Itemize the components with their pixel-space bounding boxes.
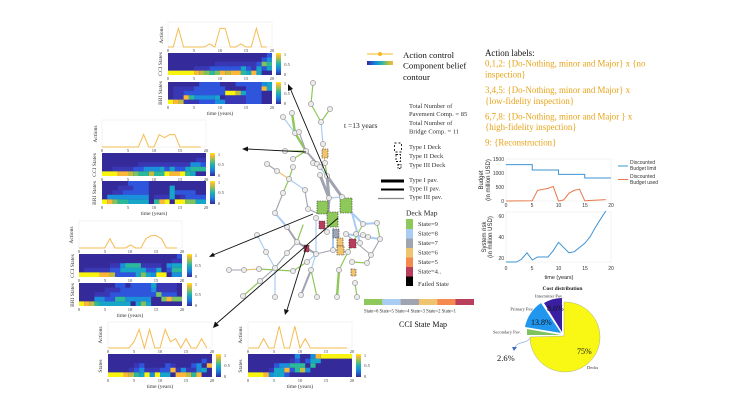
- text: action labels: {high-fidelity inspection}: [485, 122, 577, 132]
- axis labels: BRI States: [92, 181, 98, 205]
- axis labels: 0: [101, 205, 104, 210]
- chart: system risk: 20: [608, 266, 614, 272]
- colorbars: 0.5: [195, 263, 202, 268]
- colorbar: 0.5: [224, 363, 231, 368]
- chart: system risk: 5: [531, 266, 534, 272]
- arrow: to fourth plots: [213, 218, 338, 328]
- colorbars: 1: [284, 52, 286, 57]
- text: action labels: Action labels:: [485, 48, 535, 58]
- chart: system risk: 15: [582, 266, 588, 272]
- chart: actions line: 15: [184, 349, 189, 354]
- axis labels: [238, 359, 355, 390]
- text: component totals: Total Number of: [409, 103, 453, 110]
- axis labels: 15: [154, 307, 159, 312]
- arrow: to third plots: [209, 214, 313, 257]
- legend: deck types: [394, 143, 446, 169]
- axis labels: 10: [152, 205, 157, 210]
- axis labels: time (years): [287, 383, 313, 390]
- text: time stamp: t =13 years: [344, 121, 377, 130]
- axis labels: 20: [350, 378, 355, 383]
- chart: actions line: Actions: [98, 326, 104, 344]
- axis labels: 5: [127, 205, 130, 210]
- chart: actions line: 0: [101, 148, 104, 153]
- axis labels: 15: [324, 378, 329, 383]
- colorbar: 1: [224, 353, 226, 358]
- chart: budget: 10: [556, 203, 561, 209]
- chart: actions line: 20: [270, 48, 275, 53]
- legend: budget lines: Budget used: [630, 180, 658, 186]
- chart: budget: 0: [505, 203, 508, 209]
- axis labels: 5: [193, 76, 196, 81]
- text: action labels: 9: {Reconstruction}: [485, 138, 556, 148]
- axis labels: 0: [78, 278, 81, 283]
- chart: actions line: 20: [210, 349, 215, 354]
- axis labels: 0: [167, 76, 170, 81]
- axis labels: CCI States: [92, 153, 98, 177]
- chart: actions line: Actions: [69, 226, 75, 244]
- chart: actions line: 15: [178, 148, 183, 153]
- heatmap: BRI states: [102, 181, 206, 204]
- chart: budget: [479, 157, 614, 209]
- chart: cost distribution pie: 75%: [577, 347, 592, 356]
- axis labels: 15: [178, 205, 183, 210]
- text: action labels: [485, 48, 646, 148]
- legend: deck types: Type II Deck: [409, 153, 444, 160]
- chart: cost distribution pie: 2.6%: [497, 353, 515, 363]
- axis labels: 10: [158, 378, 163, 383]
- axis labels: BRI States: [158, 81, 164, 105]
- legend: deck types: Type III Deck: [409, 162, 446, 169]
- legend: budget lines: [618, 160, 658, 186]
- axis labels: [92, 153, 209, 217]
- colorbar: 1: [364, 353, 366, 358]
- axis labels: 20: [270, 76, 275, 81]
- legend: deck map: State=5: [418, 259, 438, 266]
- colorbars: 0: [284, 72, 287, 77]
- legend: pavement types: Type III pav.: [409, 194, 443, 201]
- colorbar: 0: [364, 374, 367, 379]
- chart: system risk: (in million USD): [488, 216, 494, 258]
- colorbars: 0: [195, 303, 198, 308]
- axis labels: time (years): [117, 312, 143, 319]
- axis labels: 10: [218, 105, 223, 110]
- axis labels: 10: [128, 278, 133, 283]
- chart: cost distribution pie: [493, 286, 600, 372]
- axis labels: BRI States: [70, 283, 76, 307]
- colorbar: 0: [224, 374, 227, 379]
- axis labels: 5: [104, 307, 107, 312]
- chart: actions line: [159, 22, 275, 53]
- axis labels: time (years): [147, 383, 173, 390]
- panel: top component plots: [158, 22, 291, 117]
- chart: cost distribution pie: 8.6%: [547, 304, 564, 313]
- axis labels: 20: [270, 105, 275, 110]
- chart: actions line: [69, 221, 185, 254]
- legend: budget lines: Discounted: [630, 174, 655, 180]
- legend: budget lines: Discounted: [630, 160, 655, 166]
- legend: pavement types: Type II pav.: [409, 186, 440, 192]
- axis labels: 20: [210, 378, 215, 383]
- colorbars: [210, 152, 225, 206]
- axis labels: 5: [127, 177, 130, 182]
- legend: pavement types: [378, 177, 443, 201]
- chart: system risk: 60: [498, 214, 504, 220]
- chart: system risk: 40: [498, 235, 504, 241]
- axis labels: 10: [298, 378, 303, 383]
- axis labels: 0: [247, 378, 250, 383]
- axis labels: time (years): [207, 110, 233, 117]
- legend: CCI state map: CCI State Map: [399, 320, 447, 329]
- chart: budget: (in million USD): [486, 159, 492, 201]
- colorbars: 0: [195, 274, 198, 279]
- axis labels: 0: [107, 378, 110, 383]
- chart: actions line: [238, 322, 355, 354]
- axis labels: 15: [178, 177, 183, 182]
- chart: budget: 0: [501, 199, 504, 205]
- axis labels: 10: [218, 76, 223, 81]
- axis labels: 5: [104, 278, 107, 283]
- legend: deck map: State=4..: [418, 268, 442, 276]
- chart: actions line: 10: [218, 48, 223, 53]
- colorbars: 0.5: [284, 91, 291, 96]
- heatmap: BRI states: [168, 82, 272, 104]
- chart: actions line: 10: [298, 349, 303, 354]
- chart: budget: Budget: [479, 170, 485, 190]
- chart: actions line: 20: [350, 349, 355, 354]
- chart: budget: 1000: [493, 171, 504, 177]
- chart: actions line: 5: [133, 349, 136, 354]
- colorbars: 1: [195, 282, 197, 287]
- colorbars: 0: [284, 101, 287, 106]
- chart: cost distribution pie: Cost distribution: [543, 286, 582, 292]
- legend: action control and belief contour: contour: [403, 72, 430, 82]
- chart: cost distribution pie: 13.8%: [531, 318, 552, 327]
- deck squares: [304, 149, 356, 276]
- arrow: to second plots: [242, 146, 306, 152]
- axis labels: 15: [244, 76, 249, 81]
- legend: action control and belief contour: [367, 50, 466, 82]
- chart: system risk: [482, 211, 614, 281]
- colorbars: 0.5: [195, 292, 202, 297]
- heatmap: CCI states: [102, 153, 206, 176]
- legend: action control and belief contour: Component belief: [403, 60, 466, 70]
- network edges: [229, 83, 380, 297]
- legend: deck map: State=7: [418, 240, 439, 247]
- colorbars: 1: [284, 81, 286, 86]
- panel: fourth component plots: [98, 322, 231, 390]
- legend: deck map: Failed State: [418, 281, 449, 288]
- chart: system risk: 20: [498, 256, 504, 262]
- text: action labels: {low-fidelity inspection}: [485, 96, 574, 106]
- text: action labels: 6,7,8: {Do-Nothing, minor and Major } x: [485, 112, 633, 122]
- chart: actions line: 15: [324, 349, 329, 354]
- legend: deck map: State=9: [418, 221, 438, 228]
- axis labels: [70, 254, 185, 319]
- axis labels: 0: [101, 177, 104, 182]
- axis labels: 5: [273, 378, 276, 383]
- legend: deck map: State=8: [418, 230, 438, 238]
- network nodes: [226, 80, 383, 300]
- axis labels: 0: [78, 307, 81, 312]
- legend: deck map: [406, 208, 449, 288]
- chart: actions line: 0: [78, 249, 81, 254]
- chart: actions line: 10: [158, 349, 163, 354]
- chart: budget: 500: [496, 185, 504, 191]
- chart: actions line: 0: [247, 349, 250, 354]
- chart: cost distribution pie: Intermitter Pav.: [535, 294, 563, 298]
- axis labels: 20: [180, 278, 185, 283]
- legend: action control and belief contour: Action control: [403, 50, 455, 60]
- heatmap: CCI states: [79, 254, 182, 277]
- axis labels: 20: [204, 177, 209, 182]
- colorbars: 0.5: [218, 190, 225, 195]
- colorbars: [276, 52, 291, 106]
- colorbar: [356, 353, 371, 379]
- chart: actions line: 10: [128, 249, 133, 254]
- colorbar: [216, 353, 231, 379]
- chart: actions line: Actions: [159, 26, 165, 44]
- axis labels: 10: [128, 307, 133, 312]
- chart: actions line: Actions: [93, 125, 99, 143]
- axis labels: [158, 52, 275, 117]
- chart: system risk: time (years): [544, 275, 574, 281]
- chart: actions line: [93, 120, 209, 153]
- colorbars: 0: [218, 173, 221, 178]
- arrows from network to plots: [209, 84, 338, 328]
- axis labels: CCI States: [70, 254, 76, 278]
- chart: budget: 5: [531, 203, 534, 209]
- legend: budget lines: Budget limit: [630, 166, 657, 172]
- colorbars: 0.5: [284, 62, 291, 67]
- axis labels: 20: [180, 307, 185, 312]
- chart: actions line: 15: [244, 48, 249, 53]
- panel: fifth component plots: [238, 322, 371, 390]
- chart: budget: 15: [582, 203, 588, 209]
- chart: cost distribution pie: Primary Pav.: [510, 306, 534, 312]
- legend: pavement types: Type I pav.: [409, 177, 438, 184]
- chart: actions line: Actions: [238, 326, 244, 344]
- chart: actions line: 5: [127, 148, 130, 153]
- chart: system risk: System risk: [482, 221, 488, 253]
- colorbar: 0.5: [364, 363, 371, 368]
- axis labels: 15: [244, 105, 249, 110]
- colorbars: 1: [218, 152, 220, 157]
- heatmap: states: [248, 354, 352, 377]
- text: component totals: Pavement Comp. = 85: [409, 111, 467, 118]
- axis labels: States: [98, 359, 104, 373]
- axis labels: 15: [184, 378, 189, 383]
- legend: CCI state map: [364, 299, 474, 329]
- chart: actions line: [98, 322, 215, 354]
- arrow: to fifth plots: [284, 245, 307, 315]
- chart: system risk: 0: [505, 266, 508, 272]
- axis labels: 0: [167, 105, 170, 110]
- axis labels: [98, 359, 215, 390]
- colorbars: 0: [218, 201, 221, 206]
- heatmap: states: [108, 354, 212, 377]
- axis labels: CCI States: [158, 52, 164, 76]
- chart: actions line: 20: [204, 148, 209, 153]
- axis labels: time (years): [141, 210, 167, 217]
- chart: actions line: 5: [104, 249, 107, 254]
- arrow: to top plots: [288, 84, 328, 178]
- chart: actions line: 5: [273, 349, 276, 354]
- chart: actions line: 0: [167, 48, 170, 53]
- text: action labels: inspection}: [485, 70, 526, 80]
- legend: deck map: State=6: [418, 250, 439, 256]
- chart: cost distribution pie: Decks: [587, 365, 598, 370]
- chart: system risk: 10: [556, 266, 561, 272]
- panel: second component plots: [92, 120, 225, 217]
- axis labels: States: [238, 359, 244, 373]
- chart: actions line: 15: [154, 249, 159, 254]
- legend: CCI state map: State=6 State=5 State=4 State=3 State=2 State=1: [364, 310, 457, 314]
- text: component totals: [409, 103, 467, 136]
- network graph: [226, 80, 383, 300]
- legend: deck map: Deck Map: [406, 208, 438, 218]
- chart: actions line: 5: [193, 48, 196, 53]
- chart: actions line: 20: [180, 249, 185, 254]
- colorbars: 1: [195, 253, 197, 258]
- text: action labels: 0,1,2: {Do-Nothing, minor and Major} x {no: [485, 58, 646, 68]
- heatmap: CCI states: [168, 53, 272, 75]
- axis labels: 20: [204, 205, 209, 210]
- text: component totals: Bridge Comp. = 11: [409, 128, 459, 136]
- panel: third component plots: [69, 221, 202, 319]
- chart: cost distribution pie: Secondary Pav.: [493, 330, 521, 334]
- chart: budget: 20: [608, 203, 614, 209]
- axis labels: 5: [133, 378, 136, 383]
- text: component totals: Total Number of: [409, 120, 453, 127]
- colorbars: 0.5: [218, 162, 225, 167]
- colorbars: [187, 253, 202, 308]
- axis labels: 10: [152, 177, 157, 182]
- chart: budget: 1500: [493, 157, 504, 163]
- axis labels: 15: [154, 278, 159, 283]
- text: action labels: 3,4,5: {Do-Nothing, minor and Major} x: [485, 85, 631, 95]
- chart: actions line: 10: [152, 148, 157, 153]
- legend: deck types: Type I Deck: [409, 144, 442, 151]
- heatmap: BRI states: [79, 283, 182, 306]
- colorbars: 1: [218, 180, 220, 185]
- axis labels: 5: [193, 105, 196, 110]
- chart: actions line: 0: [107, 349, 110, 354]
